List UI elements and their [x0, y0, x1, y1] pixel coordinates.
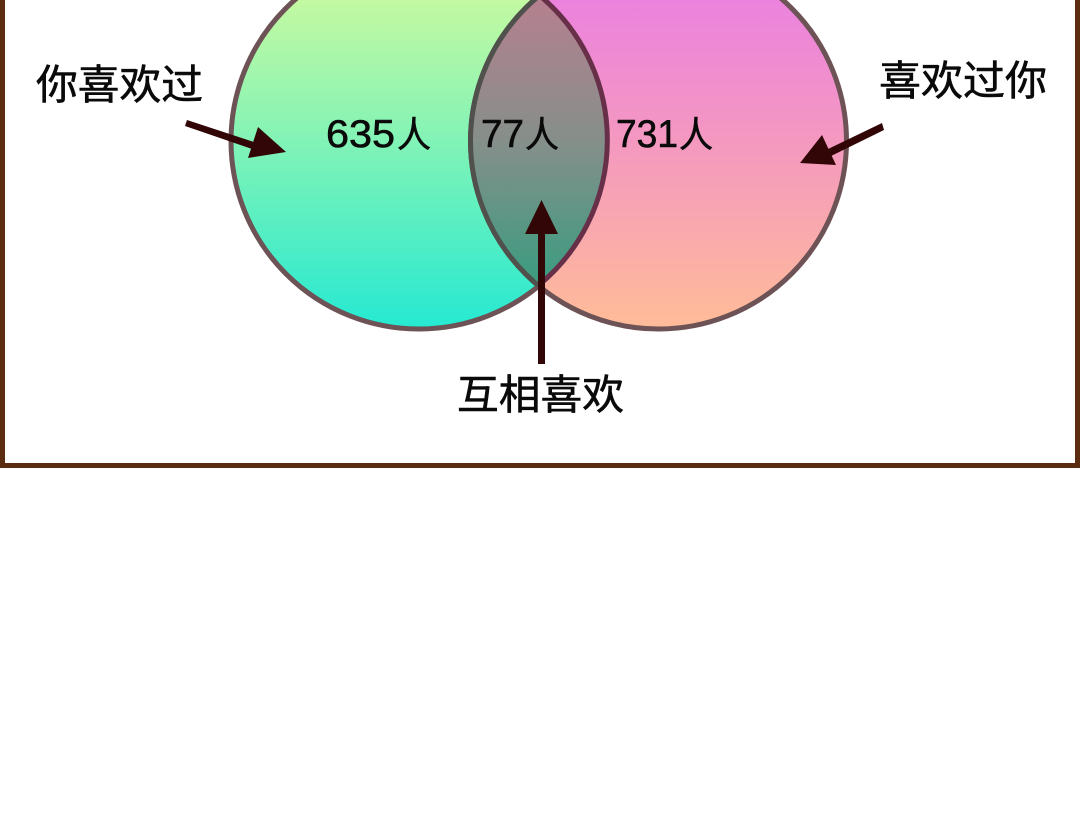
arrow: to overlap	[525, 200, 558, 364]
count: 635人	[326, 113, 431, 156]
arrow: to right circle	[800, 123, 884, 165]
count: 731人	[616, 113, 713, 156]
count: 77人	[481, 113, 559, 156]
count: 731人: 731	[616, 113, 678, 156]
circle: you liked	[231, 0, 607, 329]
venn diagram infographic	[0, 0, 1080, 468]
circle: liked you	[470, 0, 846, 329]
count: 731人: 人	[679, 114, 713, 155]
count: 635人: 人	[397, 114, 431, 155]
label: 你喜欢过: 你喜欢过	[36, 62, 203, 108]
count: 77人: 77	[481, 113, 524, 156]
count: 77人: 人	[525, 114, 559, 155]
frame: brown border	[2, 0, 1078, 466]
overlap region	[468, 0, 610, 288]
count: 635人: 635	[326, 113, 395, 156]
label: 互相喜欢: 互相喜欢	[457, 372, 624, 418]
arrow: to left circle	[185, 120, 286, 158]
label: 喜欢过你: 喜欢过你	[879, 58, 1047, 104]
